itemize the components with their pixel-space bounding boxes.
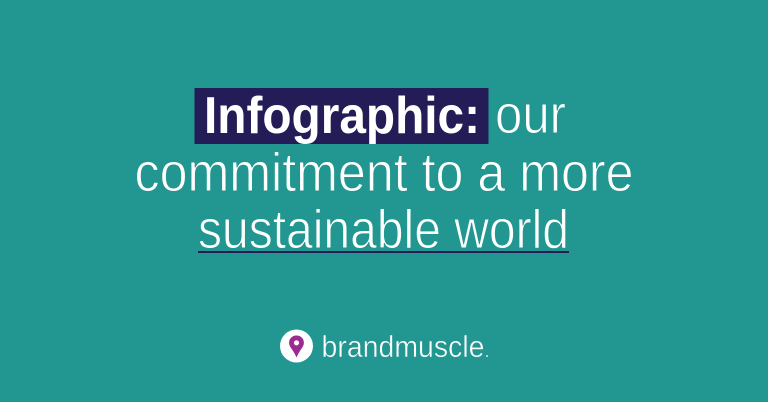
highlighted word: Infographic: Infographic: [204,87,480,145]
title [134,83,634,260]
logo: brandmuscle [280,329,488,364]
title line 3 with underline: sustainable world [198,198,569,260]
title line 1 remainder: our [495,83,566,145]
wordmark: brandmuscle [322,329,484,364]
icon: location pin in circle [280,330,313,362]
title line 2: commitment to a more [134,141,634,203]
registered mark [486,355,488,357]
